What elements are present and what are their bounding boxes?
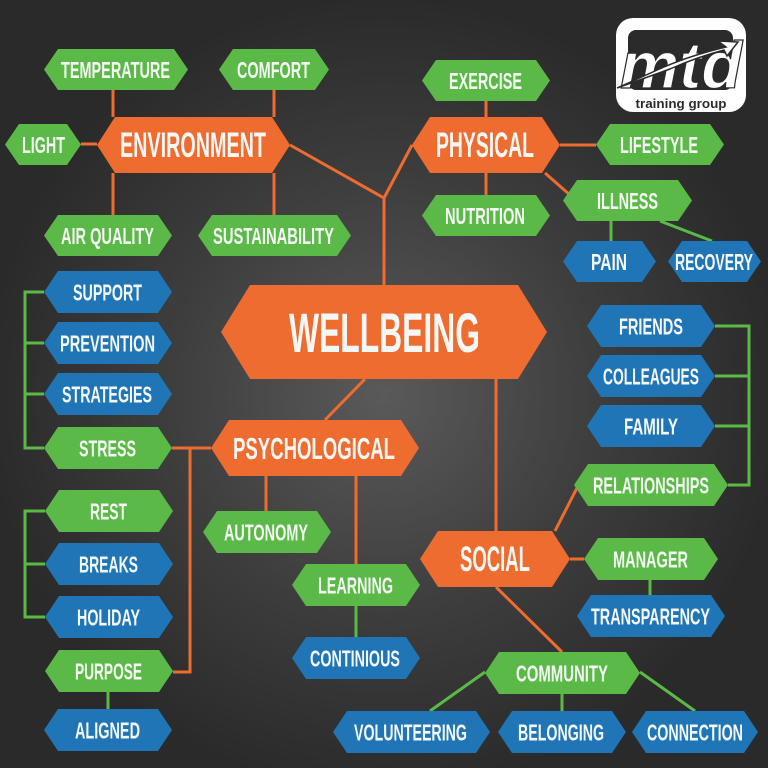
node: Prevention [44,322,172,364]
node: Friends [587,305,715,347]
node: Aligned [44,709,172,751]
connector lines [25,90,749,711]
node: Stress: STRESS [79,436,136,462]
heading: Physical [412,117,560,173]
node: Holiday: HOLIDAY [77,604,140,630]
node: Manager [584,538,718,580]
heading: Physical: PHYSICAL [436,126,534,165]
node: Autonomy [203,511,331,553]
node: Exercise [422,60,550,101]
node: Breaks [45,543,173,585]
node: Temperature: TEMPERATURE [61,57,170,83]
title: Wellbeing [221,285,547,379]
node: Friends: FRIENDS [619,314,683,340]
node: Comfort: COMFORT [237,57,310,83]
node: Recovery [668,241,761,282]
node: Family: FAMILY [624,414,678,440]
heading: Psychological: PSYCHOLOGICAL [233,431,395,466]
node: Purpose: PURPOSE [75,658,142,684]
node: Community [485,652,640,694]
node: Illness: ILLNESS [597,188,658,214]
node: Illness [563,180,692,221]
node: Strategies [44,373,172,415]
node: Strategies: STRATEGIES [62,382,152,408]
node: Nutrition: NUTRITION [445,203,525,229]
node: Connection [632,711,758,753]
node: Light [5,124,81,165]
node: Belonging [498,711,626,753]
node: Purpose [45,650,173,692]
node: Autonomy: AUTONOMY [224,520,308,546]
node: Sustainability: SUSTAINABILITY [213,223,334,249]
node: Learning [292,564,420,606]
heading: Environment: ENVIRONMENT [120,126,266,165]
node: Transparency [577,595,725,637]
node: Comfort [219,49,329,90]
node: Continious: CONTINIOUS [310,646,400,672]
node: Community: COMMUNITY [516,660,608,686]
node: Volunteering: VOLUNTEERING [354,720,467,746]
title: Wellbeing: WELLBEING [289,301,480,364]
node: Family [587,405,715,447]
node: Belonging: BELONGING [518,720,604,746]
node: Air Quality: AIR QUALITY [61,223,154,249]
node: Lifestyle [596,124,724,165]
heading: Environment [97,117,290,173]
node: Stress [44,427,172,469]
logo: mtd training group: mtd [620,28,744,102]
logo: mtd training group: training group [636,96,727,111]
node: Colleagues: COLLEAGUES [603,364,699,390]
node: Air Quality [44,215,172,256]
node: Manager: MANAGER [613,546,688,572]
node: Relationships [574,464,728,506]
node: Rest [45,490,173,532]
node: Holiday [45,596,173,638]
node: Nutrition [422,195,550,236]
node: Learning: LEARNING [318,572,393,598]
node: Rest: REST [90,498,127,524]
node: Pain [563,241,656,282]
heading: Social [420,531,570,587]
node: Support [44,271,172,313]
node: Prevention: PREVENTION [60,330,155,356]
node: Aligned: ALIGNED [75,718,140,744]
node: Temperature [44,49,188,90]
node: Volunteering [333,711,490,753]
heading: Social: SOCIAL [460,540,530,579]
node: Colleagues [587,355,715,397]
node: Exercise: EXERCISE [449,68,522,94]
node: Sustainability [198,215,351,256]
node: Pain: PAIN [591,249,627,275]
node: Continious [292,637,420,679]
node: Light: LIGHT [22,132,65,158]
node: Breaks: BREAKS [79,552,138,578]
node: Support: SUPPORT [73,280,142,306]
node: Lifestyle: LIFESTYLE [620,132,698,158]
heading: Psychological [211,420,419,476]
